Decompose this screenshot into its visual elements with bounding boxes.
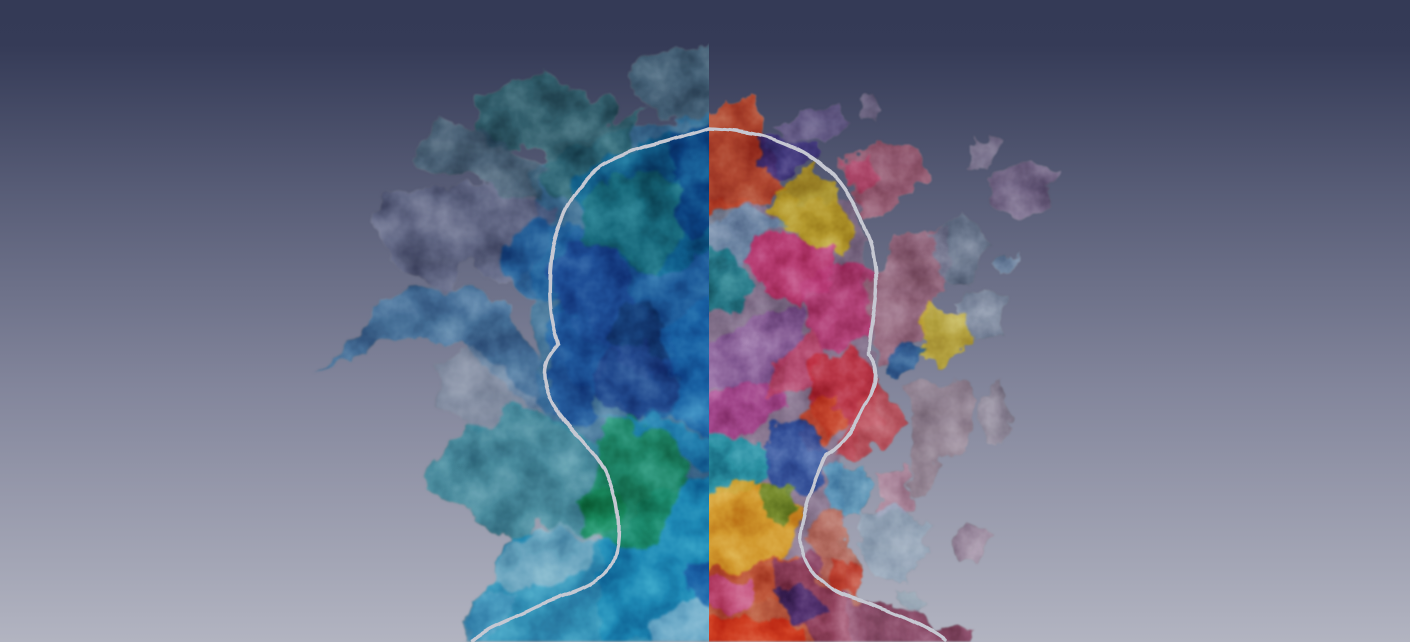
left half: cool watercolour blobs <box>310 46 725 642</box>
head outline <box>472 128 945 640</box>
right half: warm watercolour blobs <box>695 90 1055 642</box>
